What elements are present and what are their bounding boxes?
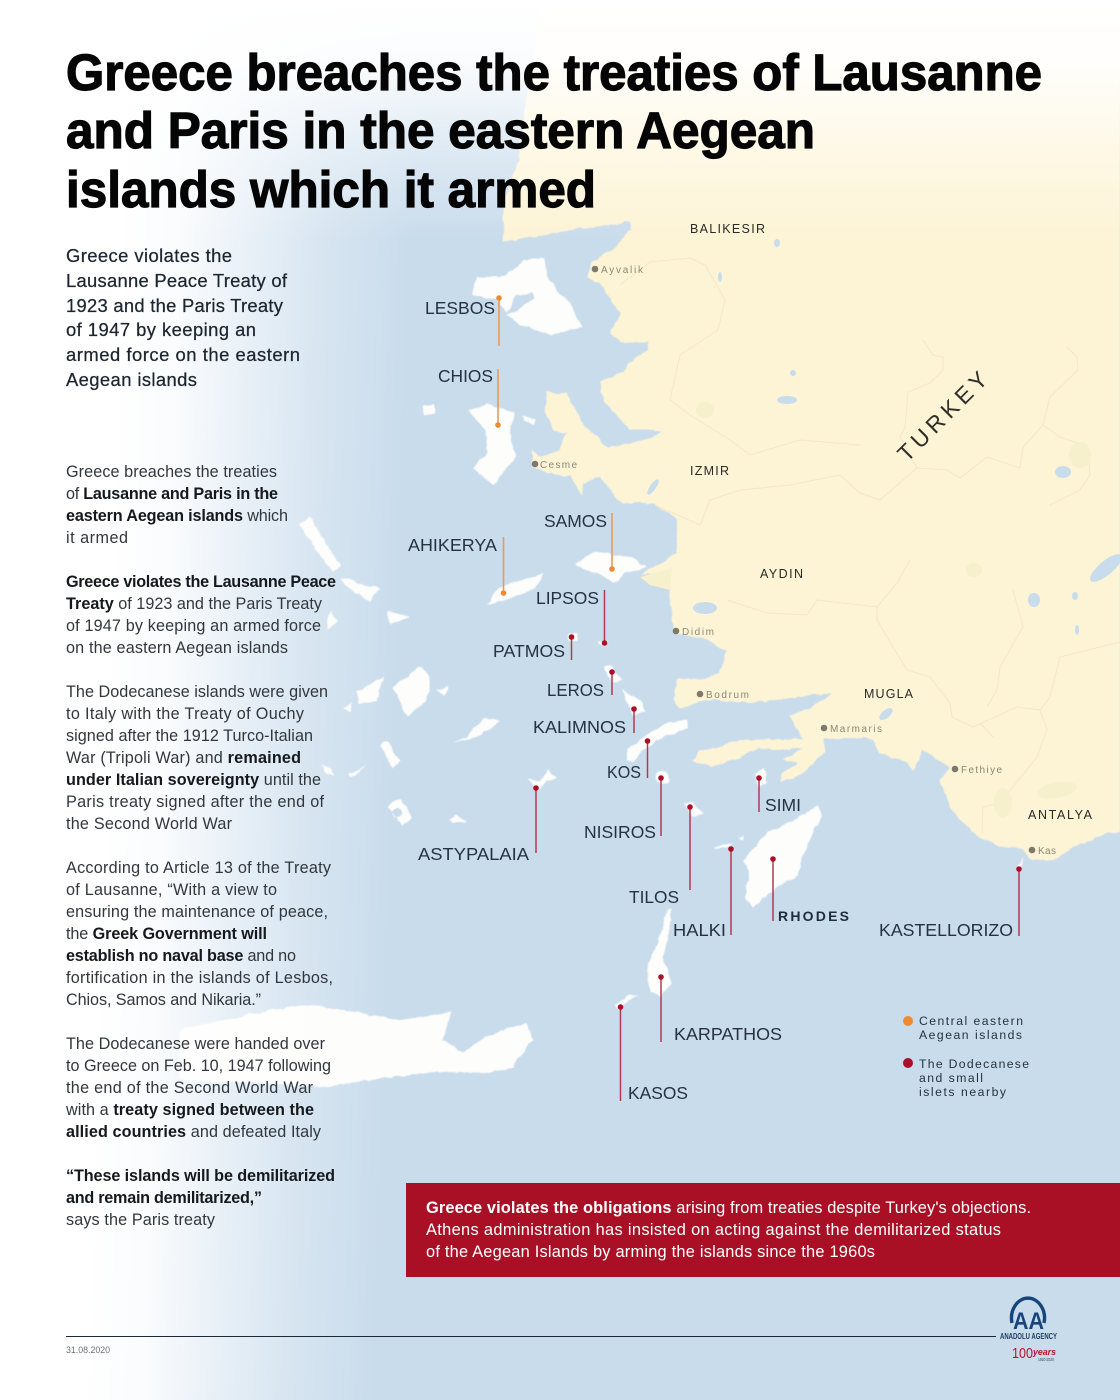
white islands	[180, 258, 1023, 1087]
city markers: Ayvalik	[601, 265, 644, 276]
intro text: Aegean islands	[66, 369, 197, 390]
logo: Anadolu Agency: years	[1032, 1347, 1056, 1357]
body text: Greece breaches the treaties	[66, 463, 277, 481]
body text: of Lausanne, “With a view to	[66, 881, 277, 899]
island labels: LEROS	[547, 680, 604, 700]
body text: the end of the Second World War	[66, 1079, 314, 1097]
body text: establish no naval base and no	[66, 947, 296, 965]
country label: Turkey: TURKEY	[892, 366, 993, 467]
city markers: Didim	[682, 627, 714, 638]
island labels: KASTELLORIZO	[879, 920, 1013, 940]
province labels: BALIKESIR	[690, 222, 765, 236]
city markers: Marmaris	[830, 724, 882, 735]
body text: it armed	[66, 529, 128, 547]
island labels: RHODES	[778, 908, 849, 924]
island labels: KOS	[607, 762, 641, 782]
body text: Treaty of 1923 and the Paris Treaty	[66, 595, 323, 613]
logo: Anadolu Agency: ANADOLU AGENCY	[1000, 1331, 1057, 1341]
island labels	[408, 298, 1013, 1103]
body text: ensuring the maintenance of peace,	[66, 903, 328, 921]
green patches	[640, 402, 1091, 818]
body text: The Dodecanese islands were given	[66, 683, 328, 701]
island labels: KARPATHOS	[674, 1024, 782, 1044]
red callout	[406, 1183, 1120, 1277]
province labels: IZMIR	[690, 464, 729, 478]
island labels: TILOS	[629, 887, 679, 907]
island labels: KASOS	[628, 1083, 688, 1103]
island labels: SAMOS	[544, 511, 607, 531]
body text: The Dodecanese were handed over	[66, 1035, 326, 1053]
body text: According to Article 13 of the Treaty	[66, 859, 332, 877]
lakes	[645, 239, 1120, 722]
body text: the Greek Government will	[66, 925, 267, 943]
intro text: armed force on the eastern	[66, 344, 300, 365]
intro text: of 1947 by keeping an	[66, 319, 256, 340]
body text	[65, 463, 336, 1229]
legend	[903, 1014, 1029, 1099]
body text: on the eastern Aegean islands	[66, 639, 288, 657]
island labels: NISIROS	[584, 822, 656, 842]
orange leaders: central eastern Aegean islands	[495, 295, 615, 596]
island labels: LIPSOS	[536, 588, 599, 608]
legend item: central eastern Aegean islands: Aegean islands	[919, 1028, 1022, 1042]
fade to white at top	[0, 0, 1120, 240]
body text: Paris treaty signed after the end of	[66, 793, 324, 811]
island labels: KALIMNOS	[533, 717, 626, 737]
intro text: Lausanne Peace Treaty of	[66, 270, 288, 291]
island labels: AHIKERYA	[408, 535, 497, 555]
logo: Anadolu Agency: 1920-2020	[1038, 1357, 1054, 1362]
intro text: Greece violates the	[66, 245, 232, 266]
island labels: CHIOS	[438, 366, 493, 386]
legend item: central eastern Aegean islands: Central eastern	[919, 1014, 1023, 1028]
body text: Chios, Samos and Nikaria.”	[66, 991, 261, 1009]
province labels: AYDIN	[760, 567, 803, 581]
red callout: of the Aegean Islands by arming the islands since the 1960s	[426, 1243, 875, 1261]
body text: the Second World War	[66, 815, 233, 833]
logo: Anadolu Agency: 100	[1012, 1345, 1033, 1362]
province labels: MUGLA	[864, 687, 914, 701]
body text: “These islands will be demilitarized	[66, 1167, 335, 1185]
city markers: Fethiye	[961, 765, 1002, 776]
body text: Greece violates the Lausanne Peace	[66, 573, 336, 591]
body text: of Lausanne and Paris in the	[66, 485, 278, 503]
city markers: Bodrum	[706, 690, 749, 701]
title: islands which it armed	[66, 161, 596, 218]
red callout: Athens administration has insisted on acting against the demilitarized status	[426, 1221, 1001, 1239]
body text: of 1947 by keeping an armed force	[66, 617, 321, 635]
red callout: Greece violates the obligations arising from treaties despite Turkey's objections.	[426, 1199, 1031, 1217]
body text: eastern Aegean islands which	[66, 507, 288, 525]
red leaders: the Dodecanese	[533, 590, 1022, 1101]
body text: fortification in the islands of Lesbos,	[66, 969, 333, 987]
title: and Paris in the eastern Aegean	[66, 102, 815, 159]
body text: and remain demilitarized,”	[66, 1189, 262, 1207]
province labels	[690, 222, 1093, 822]
body text: signed after the 1912 Turco-Italian	[66, 727, 313, 745]
body text: allied countries and defeated Italy	[66, 1123, 322, 1141]
legend item: the Dodecanese: and small	[919, 1071, 983, 1085]
legend item: central eastern Aegean islands	[903, 1014, 1023, 1042]
body text: War (Tripoli War) and remained	[66, 749, 301, 767]
fade to white on left	[0, 0, 430, 1400]
island labels: LESBOS	[425, 298, 495, 318]
body text: under Italian sovereignty until the	[66, 771, 321, 789]
footer line and date: 31.08.2020	[66, 1345, 110, 1356]
body text: to Greece on Feb. 10, 1947 following	[66, 1057, 331, 1075]
body text: says the Paris treaty	[66, 1211, 216, 1229]
island labels: SIMI	[765, 795, 801, 815]
intro text: 1923 and the Paris Treaty	[66, 295, 284, 316]
logo: Anadolu Agency	[1000, 1298, 1057, 1362]
city markers	[532, 265, 1056, 857]
legend item: the Dodecanese: The Dodecanese	[919, 1057, 1029, 1071]
legend item: the Dodecanese: islets nearby	[919, 1085, 1007, 1099]
title: Greece breaches the treaties of Lausanne	[66, 44, 1042, 101]
provincial borders	[620, 258, 1120, 833]
body text: to Italy with the Treaty of Ouchy	[66, 705, 305, 723]
island labels: HALKI	[673, 920, 726, 940]
logo: Anadolu Agency: AA	[1013, 1308, 1044, 1335]
province labels: ANTALYA	[1028, 808, 1093, 822]
intro text	[66, 245, 300, 390]
title	[66, 44, 1042, 218]
island labels: ASTYPALAIA	[418, 844, 529, 864]
legend item: the Dodecanese	[903, 1057, 1029, 1099]
city markers: Kas	[1038, 846, 1056, 857]
land: Turkey	[503, 0, 1120, 860]
island labels: PATMOS	[493, 641, 565, 661]
city markers: Cesme	[540, 460, 577, 471]
body text: with a treaty signed between the	[65, 1101, 314, 1119]
